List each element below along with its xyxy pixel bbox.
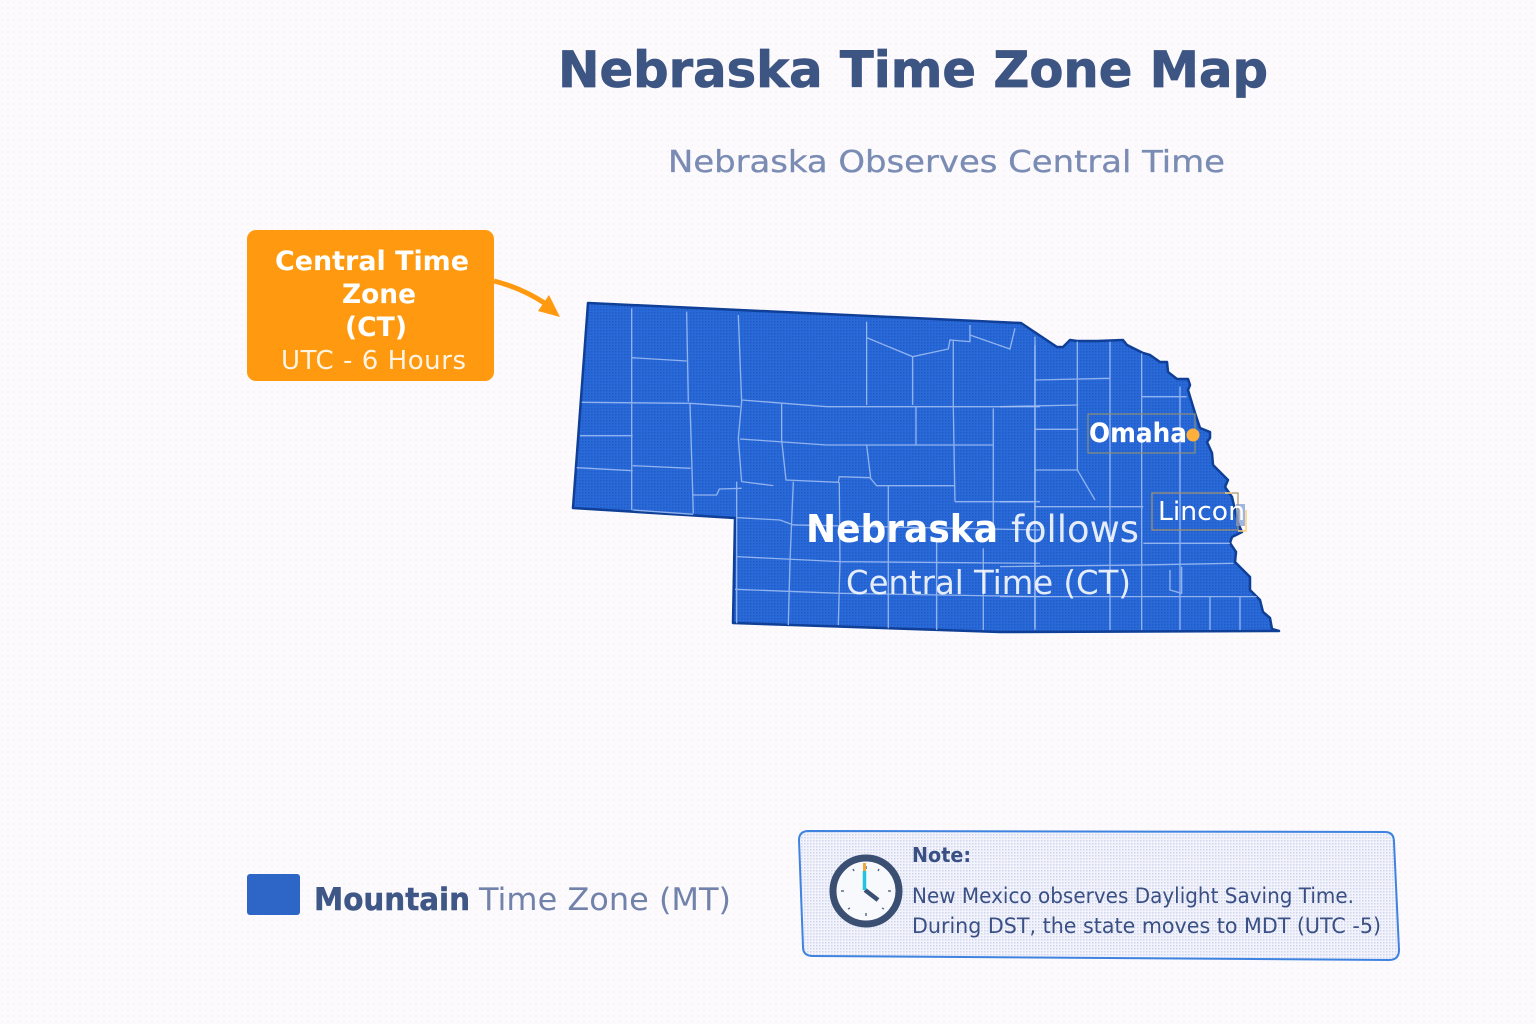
county lines east — [1000, 337, 1257, 630]
note text: New Mexico observes Daylight Saving Time. — [912, 884, 1354, 908]
legend: mountain time zone: Time Zone (MT) — [478, 882, 731, 918]
map label: Nebraska follows Central Time — [806, 507, 1139, 602]
state shape — [573, 303, 1279, 632]
map: Nebraska — [573, 303, 1279, 632]
city: Omaha: Omaha — [1089, 418, 1187, 449]
legend: mountain time zone — [247, 874, 731, 918]
callout: central time zone: Zone — [342, 279, 416, 310]
callout: central time zone: UTC - 6 Hours — [281, 346, 466, 376]
note text: Note: — [912, 843, 971, 867]
county lines west — [577, 308, 1040, 630]
callout: central time zone: (CT) — [345, 312, 407, 343]
city: Lincoln label: Lincon — [1158, 497, 1245, 527]
subtitle: Nebraska Observes Central Time — [668, 145, 1225, 180]
legend: mountain time zone: Mountain — [314, 882, 470, 918]
map label: Nebraska follows Central Time: Nebraska — [806, 507, 998, 551]
map label: Nebraska follows Central Time: follows — [1011, 508, 1139, 551]
callout: central time zone — [247, 230, 494, 381]
arrow: callout to map — [494, 281, 560, 317]
note text: During DST, the state moves to MDT (UTC -5) — [912, 914, 1381, 938]
map label: Nebraska follows Central Time: Central Time (CT) — [846, 563, 1131, 602]
icon: clock — [833, 858, 899, 924]
note panel — [799, 831, 1399, 960]
callout: central time zone: Central Time — [275, 246, 469, 277]
note text — [912, 843, 1381, 938]
title: Nebraska Time Zone Map — [558, 41, 1268, 99]
